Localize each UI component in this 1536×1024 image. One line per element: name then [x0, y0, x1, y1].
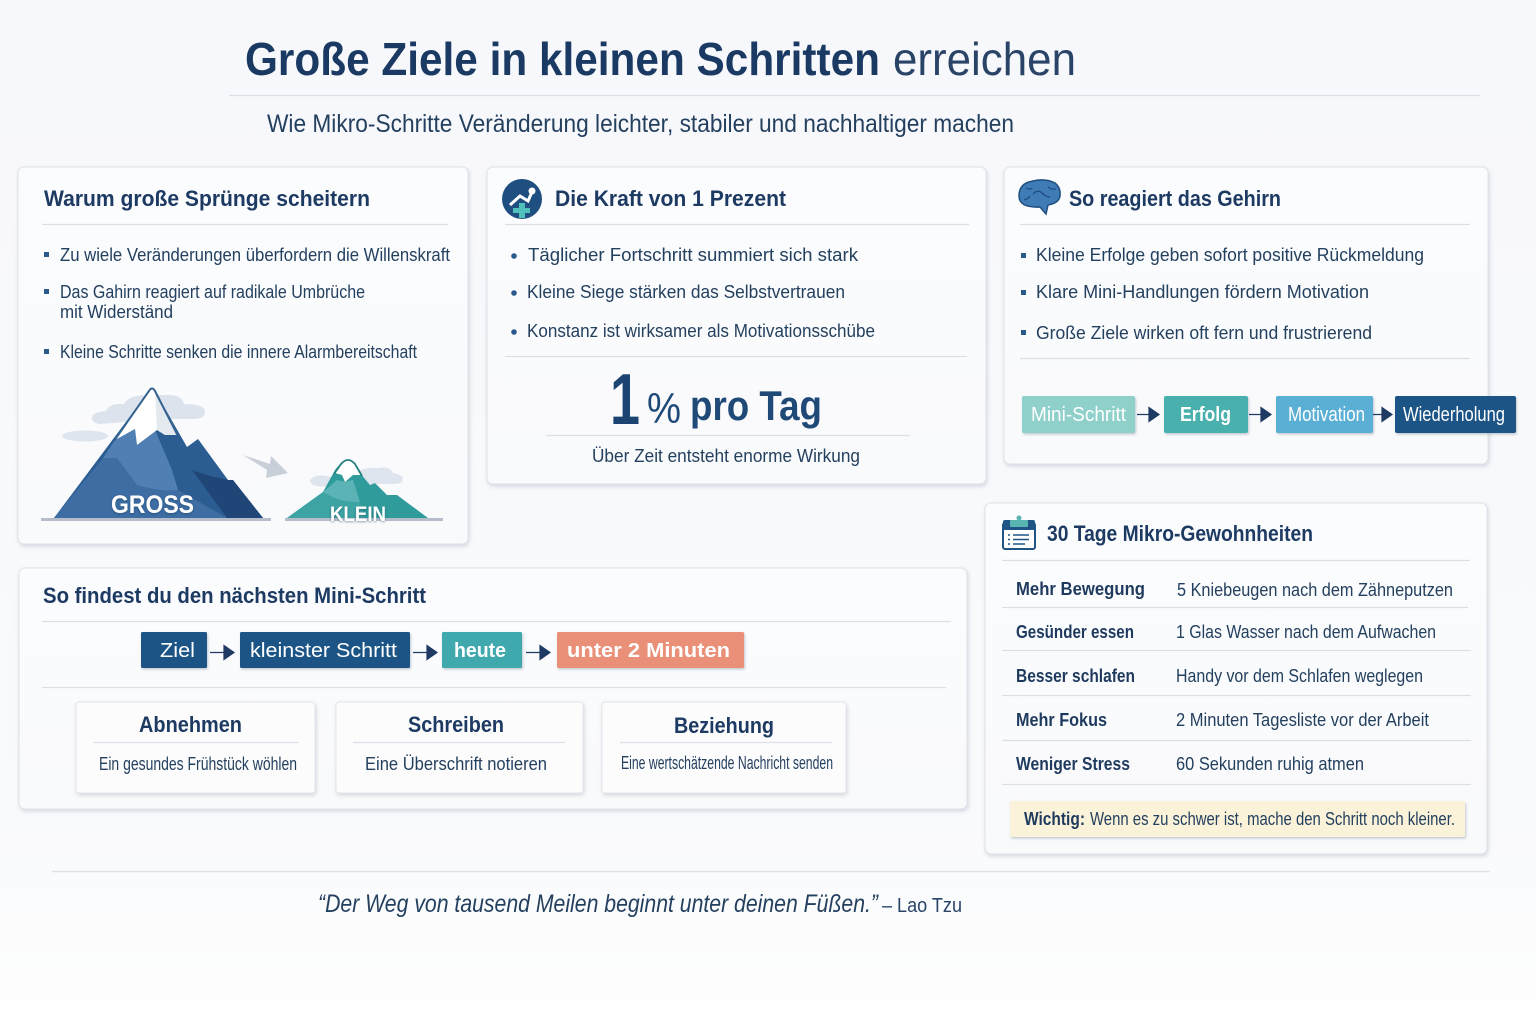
subtitle: Wie Mikro-Schritte Veränderung leichter, stabiler und nachhaltiger machen	[267, 110, 1014, 138]
table of habits: 1 Glas Wasser nach dem Aufwachen	[1176, 622, 1436, 642]
flow: steps: kleinster Schritt	[250, 640, 397, 662]
table of habits: Gesünder essen	[1016, 622, 1134, 642]
bullet list	[44, 245, 450, 362]
table of habits: Mehr Bewegung	[1016, 579, 1145, 599]
arrow	[1137, 408, 1159, 422]
heading: 30 Tage Mikro-Gewohnheiten	[1047, 521, 1313, 546]
flow: steps: heute	[454, 640, 506, 662]
panel: Warum große Sprünge scheitern	[18, 167, 468, 544]
callout: Wichtig: Wenn es zu schwer ist, mache den Schritt noch kleiner.	[1090, 809, 1455, 829]
table of habits: 2 Minuten Tagesliste vor der Arbeit	[1176, 710, 1429, 730]
icon: growth circle	[502, 179, 542, 219]
card: Schreiben: Eine Überschrift notieren	[365, 754, 547, 774]
arrow	[1249, 408, 1271, 422]
bullet list: Klare Mini-Handlungen fördern Motivation	[1036, 282, 1369, 302]
flow: steps: Ziel	[160, 640, 195, 662]
illustration: big mountain GROSS	[41, 388, 271, 521]
card: Abnehmen: Ein gesundes Frühstück wöhlen	[99, 754, 297, 774]
card: Beziehung: Eine wertschätzende Nachricht senden	[621, 753, 833, 773]
heading: Warum große Sprünge scheitern: Warum große Sprünge scheitern	[44, 186, 370, 211]
flow: reward loop	[1022, 396, 1516, 433]
arrow	[413, 646, 437, 660]
table of habits	[1002, 579, 1471, 784]
title: erreichen	[893, 33, 1076, 85]
caption: Über Zeit entsteht enorme Wirkung	[592, 446, 860, 466]
bullet list: Täglicher Fortschritt summiert sich stark	[528, 245, 859, 265]
bullet list: mit Widerständ	[60, 302, 173, 322]
title: Große Ziele in kleinen Schritten	[245, 33, 880, 85]
callout: Wichtig	[1010, 801, 1465, 837]
icon: clipboard calendar	[1003, 516, 1035, 549]
card: Abnehmen: Abnehmen	[139, 712, 242, 737]
table of habits: Handy vor dem Schlafen weglegen	[1176, 666, 1423, 686]
heading: So findest du den nächsten Mini-Schritt	[43, 583, 427, 608]
table of habits: Weniger Stress	[1016, 754, 1130, 774]
arrow: from big to small	[243, 455, 288, 478]
arrow	[210, 646, 234, 660]
card: Abnehmen	[76, 702, 315, 793]
illustration: small mountain KLEIN: KLEIN	[330, 503, 386, 526]
panel: 30 Tage Mikro-Gewohnheiten	[985, 503, 1487, 854]
icon: brain	[1019, 180, 1060, 214]
panel: Die Kraft von 1 Prozent	[487, 167, 986, 484]
panel: So findest du den nächsten Mini-Schritt	[19, 568, 967, 809]
quote: “Der Weg von tausend Meilen beginnt unter deinen Füßen.”	[318, 890, 879, 918]
illustration: small mountain KLEIN	[285, 460, 443, 526]
table of habits: 60 Sekunden ruhig atmen	[1176, 754, 1364, 774]
stat: 1% pro Tag: %	[647, 385, 681, 433]
flow: steps	[141, 632, 744, 668]
table of habits: Besser schlafen	[1016, 666, 1135, 686]
flow: reward loop: Mini-Schritt	[1031, 404, 1126, 426]
card: Schreiben: Schreiben	[408, 712, 504, 737]
flow: reward loop: Erfolg	[1180, 404, 1231, 426]
flow: steps: unter 2 Minuten	[567, 640, 730, 662]
card: Beziehung	[602, 702, 846, 793]
panel: So reagiert das Gehirn	[1004, 167, 1516, 464]
flow: reward loop: Motivation	[1288, 404, 1365, 426]
table of habits: Mehr Fokus	[1016, 710, 1107, 730]
table of habits: 5 Kniebeugen nach dem Zähneputzen	[1177, 580, 1453, 600]
bullet list: Konstanz ist wirksamer als Motivationsschübe	[527, 321, 875, 341]
bullet list: Das Gahirn reagiert auf radikale Umbrüche	[60, 282, 365, 302]
quote: – Lao Tzu	[882, 895, 962, 917]
illustration: big mountain GROSS: GROSS	[111, 491, 194, 519]
bullet list: Große Ziele wirken oft fern und frustrierend	[1036, 323, 1372, 343]
card: Schreiben	[336, 702, 583, 793]
bullet list	[1021, 245, 1424, 343]
bullet list: Zu wiele Veränderungen überfordern die Willenskraft	[60, 245, 450, 265]
stat: 1% pro Tag: 1	[610, 360, 640, 440]
heading: So reagiert das Gehirn: So reagiert das Gehirn	[1069, 186, 1281, 211]
stat: 1% pro Tag	[610, 360, 822, 440]
bullet list: Kleine Siege stärken das Selbstvertrauen	[527, 282, 845, 302]
flow: reward loop: Wiederholung	[1403, 404, 1505, 426]
heading: Die Kraft von 1 Prezent: Die Kraft von 1 Prezent	[555, 186, 787, 211]
bullet list: Kleine Schritte senken die innere Alarmbereitschaft	[60, 342, 417, 362]
arrow	[526, 646, 550, 660]
arrow	[1373, 408, 1392, 422]
card: Beziehung: Beziehung	[674, 713, 774, 738]
bullet list	[511, 245, 875, 341]
bullet list: Kleine Erfolge geben sofort positive Rückmeldung	[1036, 245, 1424, 265]
callout: Wichtig: Wichtig:	[1024, 809, 1085, 829]
stat: 1% pro Tag: pro Tag	[690, 382, 822, 429]
